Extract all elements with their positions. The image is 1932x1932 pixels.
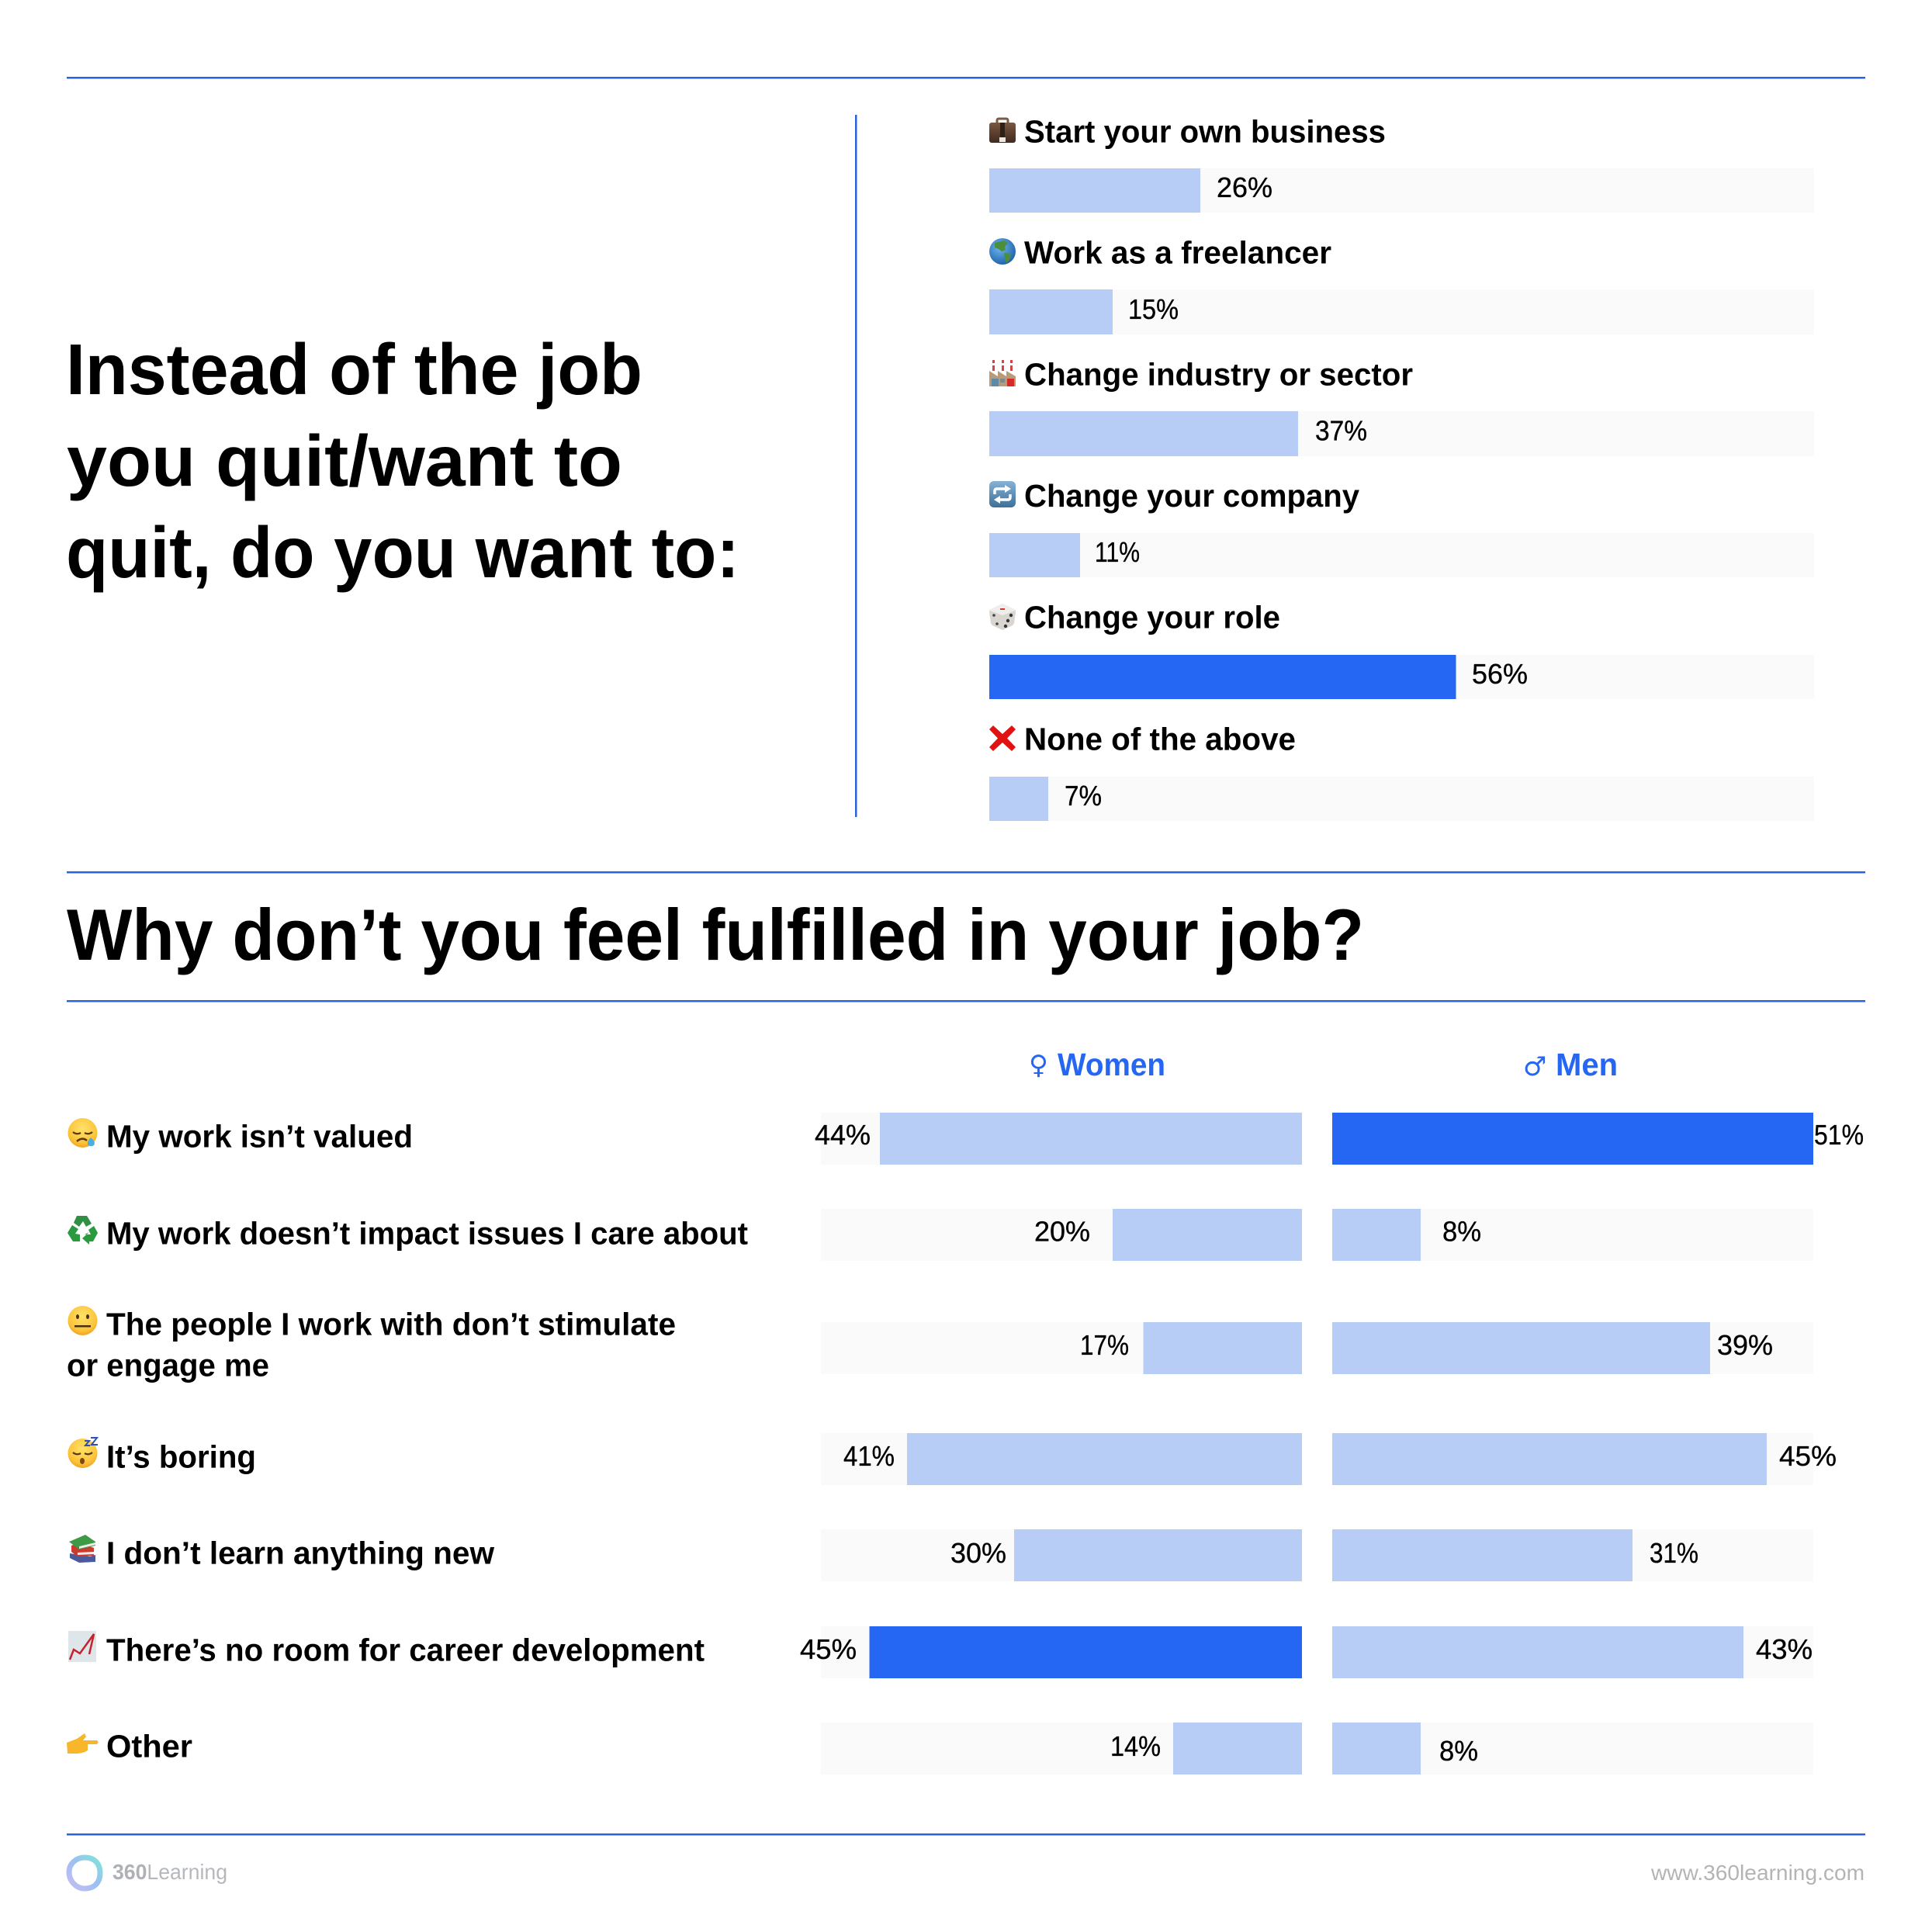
row: no room for career development	[68, 1626, 1813, 1678]
column header: women: Women	[1058, 1047, 1165, 1082]
row: the people I work with: The people I work with don’t stimulate	[106, 1307, 676, 1342]
icon: sleeping face	[68, 1438, 98, 1468]
women bar: 45% highlighted: 45%	[800, 1633, 857, 1665]
women bar: 44%: 44%	[815, 1119, 871, 1151]
women bar: 30%	[821, 1529, 1302, 1581]
men bar: 8%	[1332, 1723, 1813, 1774]
women bar: 20%: 20%	[1034, 1215, 1090, 1248]
men bar: 45%: 45%	[1779, 1440, 1837, 1472]
women bar: 45% highlighted	[800, 1626, 1302, 1678]
women bar: 30%: 30%	[950, 1537, 1006, 1569]
row: I don't learn anything new	[69, 1529, 1813, 1581]
women bar: 20%	[821, 1209, 1302, 1261]
women bar: 41%	[821, 1433, 1302, 1485]
bar: 15%: 15%	[1128, 293, 1179, 325]
row: my work isn't valued	[68, 1113, 1864, 1165]
column header: men: ♂	[1523, 1051, 1546, 1082]
option: none of the above: None of the above	[1024, 722, 1296, 757]
footer logo: 360Learning	[69, 1858, 227, 1889]
women bar: 14%	[821, 1723, 1302, 1774]
heading: instead of the job: quit, do you want to:	[66, 512, 739, 593]
men bar: 43%: 43%	[1756, 1633, 1813, 1665]
women bar: 17%: 17%	[1080, 1329, 1129, 1361]
top divider line	[67, 77, 1865, 79]
icon: red cross	[989, 725, 1016, 751]
option: change your company: Change your company	[1024, 478, 1359, 514]
bar: 7%: 7%	[1065, 780, 1102, 812]
row: the people I work with: or engage me	[67, 1347, 269, 1383]
row: it's boring	[68, 1433, 1837, 1485]
row: no room for career development: There’s no room for career development	[106, 1633, 705, 1668]
bar: 11%: 11%	[1095, 536, 1140, 568]
option: change your role	[989, 599, 1814, 699]
bar: 56% highlighted	[989, 655, 1814, 699]
bar: 11%	[989, 533, 1814, 577]
option: none of the above	[989, 722, 1814, 821]
row: my work isn't valued: My work isn’t valued	[106, 1119, 413, 1155]
column header: women: ♀	[1029, 1050, 1048, 1081]
option: change industry or sector: Change industry or sector	[1024, 357, 1413, 393]
men bar: 8%: 8%	[1442, 1215, 1481, 1248]
icon: globe	[989, 238, 1016, 265]
row: I don't learn anything new: I don’t learn anything new	[106, 1535, 494, 1570]
row: the people I work with	[67, 1306, 1813, 1383]
bar: 56% highlighted: 56%	[1472, 658, 1528, 690]
heading: instead of the job	[66, 329, 739, 593]
column header: men	[1523, 1047, 1618, 1082]
row: other: Other	[106, 1729, 192, 1764]
icon: rising chart	[68, 1631, 96, 1662]
option: start your own business	[989, 113, 1814, 213]
bar: 26%	[989, 168, 1814, 213]
row: my work doesn't impact issues	[68, 1209, 1813, 1261]
heading: why don't you feel fulfilled: Why don’t you feel fulfilled in your job?	[67, 894, 1364, 975]
divider below second heading	[67, 1000, 1865, 1002]
women bar: 44%	[815, 1113, 1302, 1165]
bar: 37%: 37%	[1315, 414, 1367, 447]
row: other	[67, 1723, 1813, 1774]
panel: reasons by gender chart	[67, 1113, 1864, 1774]
divider above second heading	[67, 871, 1865, 874]
bar: 37%	[989, 411, 1814, 456]
heading: instead of the job: you quit/want to	[67, 421, 622, 501]
women bar: 41%: 41%	[843, 1440, 895, 1472]
panel: career change options chart	[989, 113, 1814, 821]
men bar: 51% highlighted	[1332, 1113, 1864, 1165]
icon: logo ring	[69, 1858, 100, 1889]
icon: recycle	[68, 1216, 98, 1245]
column header: men: Men	[1556, 1047, 1618, 1082]
men bar: 45%	[1332, 1433, 1837, 1485]
icon: repeat arrows	[989, 481, 1016, 507]
women bar: 17%	[821, 1322, 1302, 1374]
men bar: 8%	[1332, 1209, 1813, 1261]
men bar: 31%: 31%	[1650, 1537, 1698, 1569]
icon: die	[989, 604, 1016, 630]
bar: 7%	[989, 777, 1814, 821]
icon: sad face	[68, 1118, 98, 1148]
heading: instead of the job: Instead of the job	[66, 329, 642, 410]
icon: neutral face	[68, 1306, 98, 1335]
men bar: 39%	[1332, 1322, 1813, 1374]
row: my work doesn't impact issues: My work doesn’t impact issues I care about	[106, 1215, 748, 1251]
vertical divider	[855, 115, 857, 817]
footer logo: 360Learning: 360Learning	[113, 1860, 227, 1884]
option: change industry or sector	[989, 357, 1814, 456]
men bar: 39%: 39%	[1717, 1329, 1773, 1361]
men bar: 51% highlighted: 51%	[1814, 1119, 1864, 1151]
icon: pointing hand	[67, 1733, 98, 1754]
bar: 26%: 26%	[1217, 171, 1272, 203]
row: it's boring: It’s boring	[106, 1439, 256, 1474]
icon: books	[69, 1535, 95, 1563]
option: change your company	[989, 478, 1814, 577]
women bar: 14%: 14%	[1110, 1730, 1161, 1762]
men bar: 8%: 8%	[1439, 1735, 1478, 1767]
option: work as a freelancer: Work as a freelancer	[1024, 234, 1331, 270]
icon: factory	[989, 360, 1016, 386]
bar: 15%	[989, 289, 1814, 334]
footer website: www.360learning.com	[1650, 1861, 1864, 1885]
option: work as a freelancer	[989, 234, 1814, 334]
men bar: 31%	[1332, 1529, 1813, 1581]
footer divider	[67, 1833, 1865, 1836]
option: start your own business: Start your own business	[1024, 113, 1386, 149]
icon: briefcase	[989, 119, 1016, 143]
men bar: 43%	[1332, 1626, 1813, 1678]
option: change your role: Change your role	[1024, 599, 1280, 635]
